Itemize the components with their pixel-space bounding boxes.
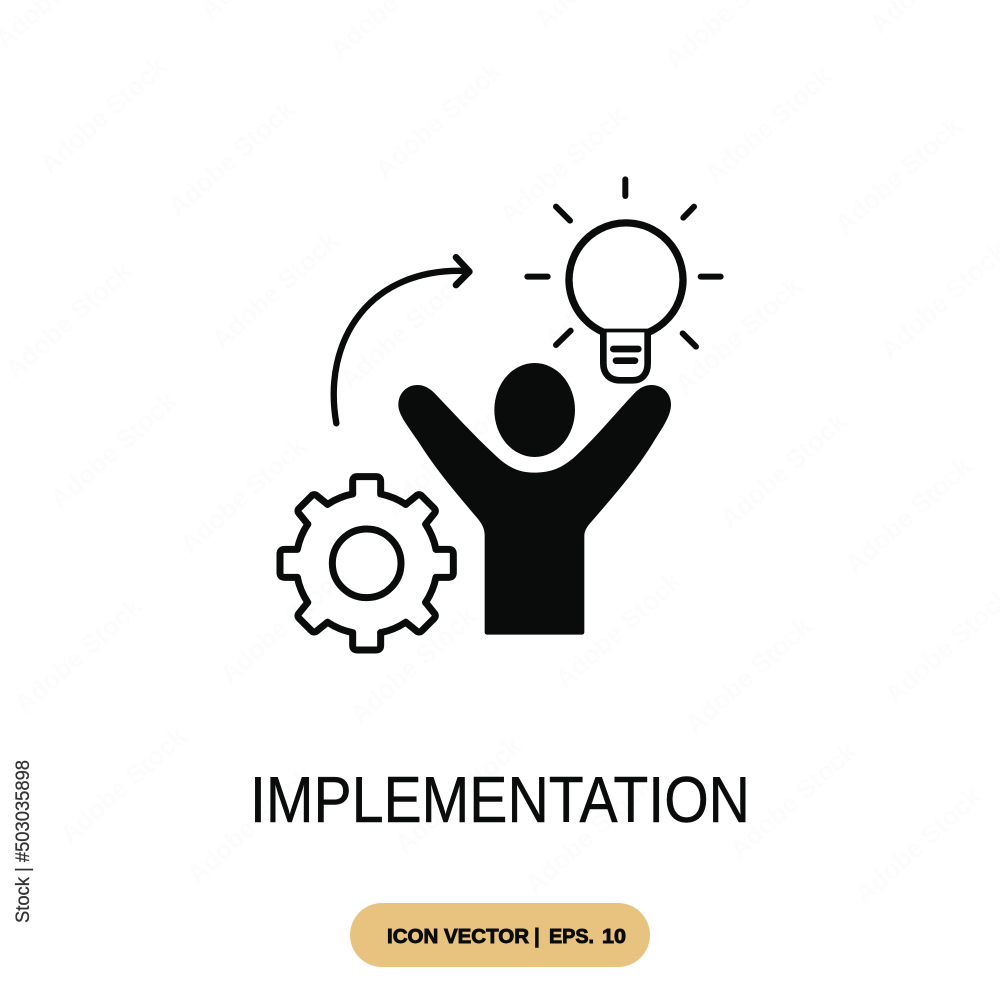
icon: light bulb bbox=[527, 179, 721, 380]
watermark pattern: Adobe Stock bbox=[174, 430, 313, 559]
watermark pattern: Adobe Stock bbox=[669, 270, 808, 399]
watermark pattern: Adobe Stock bbox=[714, 405, 853, 534]
watermark pattern: Adobe Stock bbox=[494, 100, 633, 229]
badge: icon vector eps 10: ICON VECTOR bbox=[387, 925, 529, 948]
icon: gear bbox=[278, 474, 456, 652]
watermark pattern: Adobe Stock bbox=[369, 55, 508, 184]
watermark pattern: Adobe Stock bbox=[54, 720, 193, 849]
title: IMPLEMENTATION bbox=[250, 763, 750, 836]
watermark pattern: Adobe Stock bbox=[34, 50, 173, 179]
watermark pattern: Adobe Stock bbox=[509, 435, 648, 564]
watermark pattern: Adobe Stock bbox=[699, 60, 838, 189]
watermark pattern: Adobe Stock bbox=[334, 265, 473, 394]
watermark pattern: Adobe Stock bbox=[379, 390, 518, 519]
watermark pattern: Adobe Stock bbox=[519, 770, 658, 899]
watermark pattern: Adobe Stock bbox=[9, 590, 148, 719]
watermark pattern: Adobe Stock bbox=[344, 600, 483, 729]
watermark pattern: Adobe Stock bbox=[839, 450, 978, 579]
icon: implementation illustration bbox=[278, 179, 721, 652]
badge: icon vector eps 10 bbox=[350, 903, 650, 967]
watermark pattern: Adobe Stock bbox=[679, 610, 818, 739]
watermark pattern: Adobe Stock bbox=[849, 780, 988, 909]
watermark pattern: Adobe Stock bbox=[44, 385, 183, 514]
watermark pattern: Adobe Stock bbox=[214, 560, 353, 689]
watermark pattern: Adobe Stock bbox=[539, 225, 678, 354]
watermark pattern: Adobe Stock bbox=[389, 730, 528, 859]
stock id side text: Stock | #503035898 bbox=[13, 760, 34, 923]
watermark pattern: Adobe Stock bbox=[206, 225, 345, 354]
watermark pattern: Adobe Stock bbox=[829, 110, 968, 239]
watermark pattern: Adobe Stock bbox=[181, 760, 320, 889]
watermark pattern: Adobe Stock bbox=[724, 735, 863, 864]
icon: curved arrow bbox=[334, 257, 469, 423]
badge: icon vector eps 10: 10 bbox=[602, 925, 626, 948]
watermark pattern: Adobe Stock bbox=[549, 565, 688, 694]
watermark pattern: Adobe Stock bbox=[162, 93, 301, 222]
badge: icon vector eps 10: | bbox=[534, 925, 540, 948]
icon: person with raised arms bbox=[398, 363, 671, 635]
watermark pattern: Adobe Stock bbox=[0, 255, 138, 384]
badge: icon vector eps 10: EPS. bbox=[549, 925, 594, 948]
